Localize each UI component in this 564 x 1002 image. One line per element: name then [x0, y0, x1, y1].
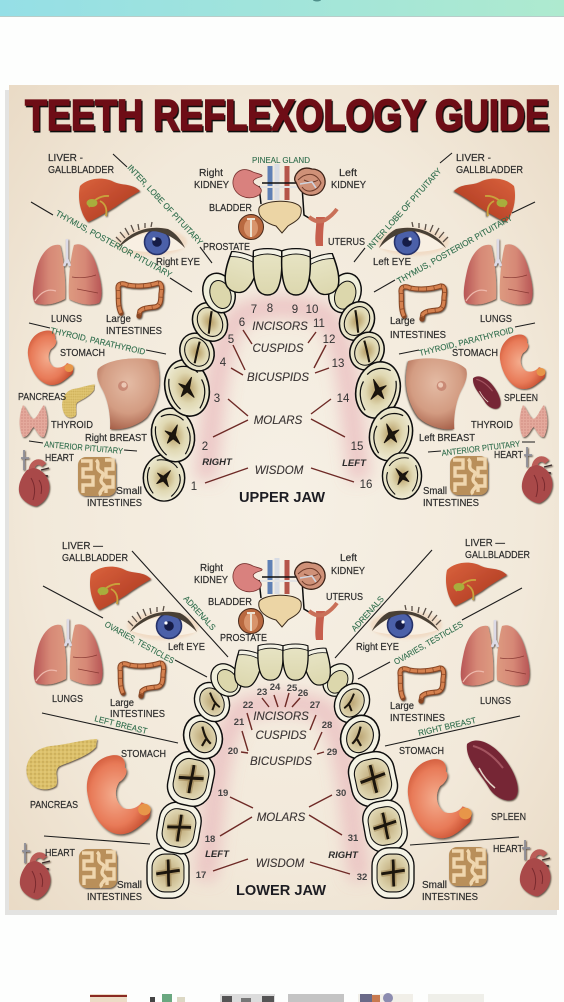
thumbnail 3	[220, 994, 275, 1002]
green meridian labels lower: ADRENALS	[349, 594, 386, 633]
organ labels upper: Left EYE	[373, 257, 411, 268]
organ labels lower: Small	[422, 880, 447, 891]
green meridian labels upper: THYMUS, POSTERIOR PITUITARY	[395, 212, 514, 286]
tooth numbers lower: 20	[228, 746, 238, 757]
organ: heart right side	[19, 450, 49, 506]
organ: small intestines right side lower	[449, 847, 487, 886]
tooth type labels lower: LEFT	[205, 849, 230, 860]
tooth type labels upper: MOLARS	[254, 415, 303, 427]
organ labels upper: Large	[106, 314, 131, 325]
tooth numbers lower: 31	[348, 833, 359, 844]
organ labels lower: LUNGS	[480, 696, 511, 707]
organ: stomach right side	[28, 330, 74, 385]
tooth type labels upper: LEFT	[342, 458, 367, 469]
tooth type labels lower: MOLARS	[257, 812, 306, 824]
organ labels lower: HEART	[45, 848, 75, 859]
organ: lungs right side lower	[461, 620, 530, 686]
organ labels upper: INTESTINES	[423, 498, 479, 509]
organ labels upper: STOMACH	[60, 348, 105, 359]
organ: stomach left side lower	[87, 755, 151, 834]
leader lines lower	[42, 550, 522, 874]
top app bar	[0, 0, 564, 17]
green meridian labels lower: OVARIES, TESTICLES	[103, 619, 176, 666]
organ labels lower: Large	[390, 701, 414, 712]
organ: right large intestine	[118, 283, 162, 316]
organ labels lower: PANCREAS	[30, 800, 78, 811]
tooth numbers lower: 23	[257, 687, 267, 698]
organ: stomach right side lower	[408, 759, 472, 838]
organ labels upper: Right	[199, 168, 223, 179]
organ labels lower: KIDNEY	[194, 575, 228, 586]
organ labels upper: STOMACH	[452, 348, 498, 359]
tooth numbers upper: 12	[323, 334, 335, 346]
organ labels lower: Right EYE	[356, 642, 399, 653]
organ labels upper: SPLEEN	[504, 393, 538, 404]
organ labels upper: THYROID	[471, 420, 513, 431]
green meridian labels lower	[94, 594, 477, 738]
tooth numbers upper: 5	[228, 334, 234, 346]
icon: right eye	[115, 222, 187, 256]
organ: liver right side lower	[446, 563, 507, 606]
panel: lower jaw	[20, 538, 550, 903]
organ labels upper: PANCREAS	[18, 392, 66, 403]
tooth numbers lower: 18	[205, 834, 215, 845]
lower teeth	[147, 644, 414, 898]
green meridian labels lower: ADRENALS	[182, 594, 218, 632]
tooth numbers lower: 27	[310, 700, 320, 711]
organ labels lower: STOMACH	[399, 746, 444, 757]
organ: liver left side	[454, 179, 515, 222]
organ labels upper: LUNGS	[51, 314, 82, 325]
organ labels upper: GALLBLADDER	[48, 165, 114, 176]
tooth numbers upper: 4	[220, 357, 227, 369]
organ labels upper: BLADDER	[209, 203, 252, 214]
organ labels upper: Left BREAST	[419, 433, 475, 444]
tooth numbers upper: 15	[351, 441, 363, 453]
green meridian labels upper: THYROID, PARATHYROID	[50, 325, 146, 357]
tooth numbers upper: 11	[313, 318, 325, 330]
organ labels upper: Right BREAST	[85, 433, 147, 444]
tooth numbers upper: 7	[251, 304, 257, 316]
green meridian labels lower: LEFT BREAST	[94, 713, 148, 736]
organ: small intestines left side lower	[79, 849, 117, 888]
organ: heart left side	[522, 447, 552, 503]
organ labels upper: UTERUS	[328, 237, 365, 248]
icon: right eye lower	[370, 605, 442, 639]
tooth numbers lower: 28	[322, 720, 332, 731]
tooth type labels lower: RIGHT	[328, 850, 359, 861]
organ: liver right side	[79, 179, 140, 222]
organ labels lower: LIVER —	[62, 541, 103, 552]
thumbnail 4	[288, 994, 344, 1002]
thumbnail 6	[428, 994, 484, 1002]
tooth numbers upper: 1	[191, 481, 197, 493]
thumbnail 1	[90, 994, 127, 1002]
tooth type labels lower: INCISORS	[253, 711, 309, 723]
icon: left eye lower	[127, 606, 199, 640]
organ labels lower: INTESTINES	[422, 892, 478, 903]
tooth numbers lower: 17	[196, 870, 206, 881]
tooth numbers upper: 16	[360, 479, 372, 491]
organ labels upper: LIVER -	[48, 153, 83, 164]
organ labels upper: PROSTATE	[203, 242, 250, 253]
organ labels lower: PROSTATE	[220, 633, 267, 644]
panel: upper jaw	[18, 153, 552, 509]
organ labels lower	[30, 538, 530, 903]
organ labels lower: GALLBLADDER	[465, 550, 530, 561]
organ: heart left side lower	[20, 843, 50, 899]
organ labels lower: UTERUS	[326, 592, 363, 603]
organ labels lower: Left EYE	[168, 642, 205, 653]
green meridian labels upper: INTER, LOBE OF PITUITARY	[126, 163, 205, 247]
pink gum glow upper	[205, 306, 360, 480]
organ labels lower: HEART	[493, 844, 523, 855]
organ: lungs left side lower	[34, 619, 103, 685]
organ labels upper: LUNGS	[480, 314, 512, 325]
organ: left lungs	[464, 239, 533, 305]
organ labels upper: HEART	[45, 453, 74, 464]
organ labels upper: Small	[423, 486, 447, 497]
organ: pancreas lower	[26, 739, 97, 789]
label: pineal gland: PINEAL GLAND	[252, 155, 310, 165]
tooth numbers lower: 21	[234, 717, 245, 728]
tooth type labels upper: INCISORS	[252, 321, 308, 333]
green meridian labels upper: THYMUS, POSTERIOR PITUITARY	[54, 208, 174, 280]
organ labels upper: THYROID	[51, 420, 93, 431]
organ labels upper: LIVER -	[456, 153, 491, 164]
thumbnail strip	[90, 993, 484, 1002]
organ: spleen lower	[467, 740, 518, 800]
thumbnail 2	[150, 994, 185, 1002]
upper teeth	[143, 249, 422, 501]
organ labels lower: INTESTINES	[110, 709, 165, 720]
tooth numbers upper: 10	[306, 304, 318, 316]
organ: heart right side lower	[520, 840, 550, 896]
organ labels lower: Large	[110, 698, 134, 709]
organ: urinary group upper	[233, 164, 337, 246]
tooth numbers upper: 3	[214, 393, 220, 405]
green meridian labels upper: ANTERIOR PITUITARY	[44, 439, 124, 456]
tooth type labels lower	[205, 711, 359, 899]
tooth type labels upper	[202, 321, 367, 506]
organ labels upper: INTESTINES	[390, 330, 446, 341]
tooth type labels lower: LOWER JAW	[236, 883, 326, 899]
organ: thyroid right side	[20, 405, 47, 437]
organ: large intestine left side lower	[120, 663, 164, 696]
tooth numbers upper: 14	[337, 393, 350, 405]
tooth numbers upper: 6	[239, 317, 245, 329]
organ labels lower: KIDNEY	[331, 566, 365, 577]
organ: stomach left side	[500, 334, 546, 389]
tooth type labels upper: CUSPIDS	[252, 343, 304, 355]
organ labels upper: Left	[339, 168, 357, 179]
pink gum glow lower	[205, 702, 360, 880]
organ: thyroid left side	[520, 405, 547, 437]
green meridian labels upper: INTER LOBE OF PITUITARY	[365, 166, 444, 251]
tooth numbers upper: 9	[292, 304, 298, 316]
organ: right lungs	[33, 239, 102, 305]
organ labels upper	[18, 153, 538, 509]
organ: pancreas	[62, 384, 95, 418]
thumbnail 5	[358, 993, 413, 1002]
organ: spleen	[473, 376, 501, 409]
tooth numbers lower	[196, 682, 367, 883]
tooth numbers lower: 32	[357, 872, 367, 883]
green meridian labels lower: RIGHT BREAST	[417, 715, 477, 738]
organ: urinary group lower	[233, 558, 337, 640]
tooth numbers upper: 13	[332, 358, 344, 370]
organ labels lower: STOMACH	[121, 749, 166, 760]
tooth type labels upper: WISDOM	[255, 465, 304, 477]
organ labels upper: KIDNEY	[194, 180, 229, 191]
tooth type labels upper: RIGHT	[202, 457, 233, 468]
tooth numbers upper: 2	[202, 441, 208, 453]
tooth numbers lower: 29	[327, 747, 337, 758]
tooth type labels upper: UPPER JAW	[239, 490, 325, 506]
organ: liver left side lower	[90, 567, 151, 610]
organ labels lower: LUNGS	[52, 694, 83, 705]
organ labels lower: BLADDER	[208, 597, 252, 608]
organ labels upper: Small	[116, 486, 142, 497]
tooth type labels lower: WISDOM	[256, 858, 305, 870]
tooth type labels lower: BICUSPIDS	[250, 756, 312, 768]
tooth numbers lower: 22	[243, 700, 253, 711]
organ labels lower: Small	[117, 880, 142, 891]
organ labels lower: SPLEEN	[491, 812, 526, 823]
organ labels upper: GALLBLADDER	[456, 165, 523, 176]
organ labels lower: INTESTINES	[390, 713, 445, 724]
tooth type labels upper: BICUSPIDS	[247, 372, 309, 384]
icon: left eye	[377, 222, 449, 256]
tooth numbers lower: 25	[287, 683, 298, 694]
organ: small intestines right side	[78, 457, 116, 496]
organ: large intestine right side lower	[400, 668, 444, 701]
green meridian labels upper: ANTERIOR PITUITARY	[441, 438, 521, 458]
tooth numbers upper: 8	[267, 303, 273, 315]
organ: left breast	[406, 358, 467, 429]
tooth numbers lower: 24	[270, 682, 281, 693]
organ: left large intestine	[401, 286, 445, 319]
organ: right breast	[97, 358, 159, 429]
leader lines upper	[29, 153, 535, 483]
tooth type labels lower: CUSPIDS	[255, 730, 307, 742]
organ labels upper: INTESTINES	[87, 498, 142, 509]
organ labels upper: INTESTINES	[106, 326, 162, 337]
organ: small intestines left side	[450, 456, 488, 495]
organ labels upper: KIDNEY	[331, 180, 366, 191]
tooth numbers lower: 19	[218, 788, 228, 799]
tooth numbers upper	[191, 303, 372, 493]
green meridian labels upper	[44, 163, 521, 458]
organ labels lower: INTESTINES	[87, 892, 142, 903]
organ labels lower: GALLBLADDER	[62, 553, 128, 564]
organ labels lower: LIVER —	[465, 538, 505, 549]
green meridian labels upper: THYROID, PARATHYROID	[418, 325, 515, 358]
tooth numbers lower: 30	[336, 788, 346, 799]
organ labels upper: Large	[390, 316, 415, 327]
tooth numbers lower: 26	[298, 688, 308, 699]
organ labels lower: Left	[340, 553, 357, 564]
organ labels upper: HEART	[494, 450, 523, 461]
organ labels lower: Right	[200, 563, 223, 574]
organ labels upper: Right EYE	[156, 257, 200, 268]
green meridian labels lower: OVARIES, TESTICLES	[392, 619, 465, 667]
